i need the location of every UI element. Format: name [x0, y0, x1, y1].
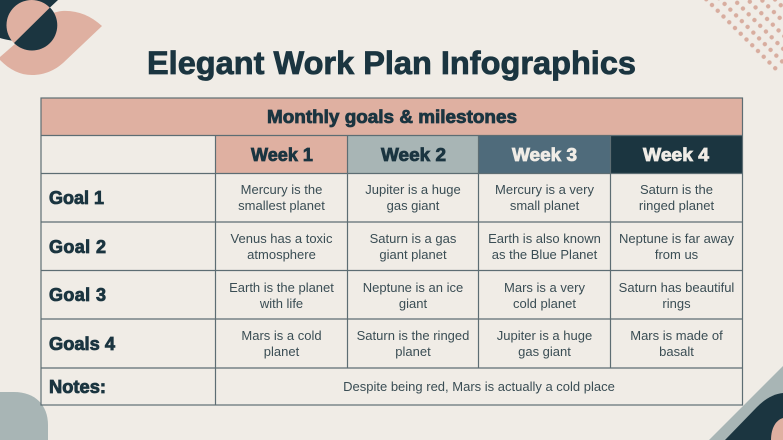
column header: week 2: Week 2 — [381, 145, 446, 165]
row: goal 2: Goal 2 — [49, 237, 106, 257]
row: goals 4 — [49, 328, 723, 359]
row: goals 4: Saturn is the ringed — [357, 328, 469, 343]
row: goals 4: Mars is a cold — [241, 328, 322, 343]
row: goal 2: atmosphere — [247, 247, 316, 262]
row: goal 1: Mercury is the — [241, 182, 322, 197]
row: goal 2: Earth is also known — [488, 231, 601, 246]
decoration: top-right dot pattern — [703, 0, 783, 71]
row: goal 2: Saturn is a gas — [370, 231, 457, 246]
row: goal 1 — [49, 182, 714, 213]
row: goal 1: ringed planet — [639, 198, 714, 213]
decoration: bottom-left shape — [0, 392, 48, 440]
row: goals 4: Goals 4 — [49, 334, 115, 354]
column header: week 3: Week 3 — [512, 145, 577, 165]
row: goal 3: giant — [399, 296, 427, 311]
table — [41, 98, 742, 405]
row: goal 2: from us — [655, 247, 699, 262]
row: goal 3 — [49, 280, 734, 311]
row: notes: Despite being red, Mars is actually a cold place — [343, 379, 615, 394]
row: notes — [49, 377, 615, 397]
column header: week 1: Week 1 — [251, 145, 313, 165]
row: goal 1: Mercury is a very — [495, 182, 594, 197]
row: goal 2: as the Blue Planet — [492, 247, 598, 262]
row: goal 2: giant planet — [379, 247, 447, 262]
row: goals 4: Mars is made of — [630, 328, 723, 343]
decoration: bottom-right shapes — [709, 366, 783, 440]
row: goal 1: Jupiter is a huge — [365, 182, 461, 197]
row: goals 4: Jupiter is a huge — [497, 328, 592, 343]
row: goal 2 — [49, 231, 734, 262]
row: goal 3: Saturn has beautiful — [619, 280, 734, 295]
table header: monthly goals — [41, 98, 742, 136]
row: goal 2: Venus has a toxic — [231, 231, 333, 246]
row: goal 2: Neptune is far away — [619, 231, 734, 246]
decoration: top-left shapes — [0, 0, 102, 75]
row: goal 3: rings — [662, 296, 691, 311]
column header: week 4: Week 4 — [643, 145, 709, 165]
row: goal 3: Earth is the planet — [229, 280, 334, 295]
row: notes: Notes: — [49, 377, 106, 397]
row: goal 3: Goal 3 — [49, 285, 106, 305]
column header: week 2 — [348, 136, 478, 174]
row: goals 4: planet — [395, 344, 431, 359]
row: goal 1: smallest planet — [238, 198, 325, 213]
table grid lines — [41, 98, 742, 405]
row: goal 3: cold planet — [513, 296, 576, 311]
column header: week 1 — [216, 136, 348, 174]
row: goals 4: gas giant — [518, 344, 571, 359]
row: goals 4: basalt — [659, 344, 694, 359]
row: goal 3: Mars is a very — [504, 280, 585, 295]
row: goal 1: gas giant — [387, 198, 440, 213]
title: Elegant Work Plan Infographics — [147, 45, 636, 81]
row: goal 3: with life — [259, 296, 303, 311]
column header: week 3 — [478, 136, 610, 174]
row: goal 1: Goal 1 — [49, 188, 104, 208]
row: goals 4: planet — [264, 344, 300, 359]
table header: monthly goals: Monthly goals & milestones — [267, 107, 517, 127]
row: goal 1: small planet — [510, 198, 580, 213]
column header: week 4 — [610, 136, 742, 174]
row: goal 1: Saturn is the — [640, 182, 713, 197]
row: goal 3: Neptune is an ice — [363, 280, 463, 295]
